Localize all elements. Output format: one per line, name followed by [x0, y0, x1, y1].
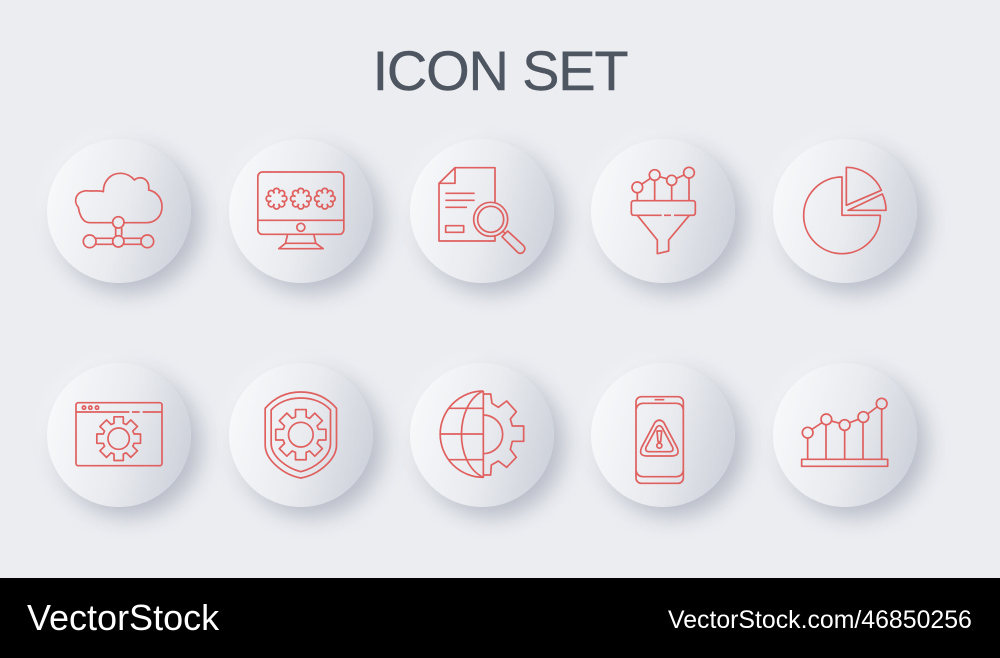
icon: pie chart [802, 166, 887, 254]
button: globe gear [410, 363, 554, 507]
button: shield settings [228, 363, 372, 507]
footer logo text: VectorStock [27, 597, 219, 638]
button: data funnel [591, 139, 735, 283]
button: phone alert [591, 363, 735, 507]
icon: smartphone with warning [635, 396, 684, 484]
icon: shield with gear [264, 391, 338, 479]
button: pie chart [773, 139, 917, 283]
button: browser settings [47, 363, 191, 507]
icon: browser window with gear [75, 402, 163, 466]
title: ICON SET [373, 39, 627, 102]
button: monitor password [228, 139, 372, 283]
button: document search [410, 139, 554, 283]
icon: cloud network [74, 172, 163, 248]
icon: document with magnifier [438, 166, 526, 254]
button: growth chart [773, 363, 917, 507]
icon: globe and gear [439, 390, 524, 478]
footer image url: VectorStock.com/46850256 [668, 607, 972, 634]
icon: line bar chart [800, 398, 888, 468]
icon: data funnel [630, 166, 696, 254]
button: cloud network [47, 139, 191, 283]
footer bar [0, 578, 1000, 658]
icon: monitor password [257, 171, 345, 250]
